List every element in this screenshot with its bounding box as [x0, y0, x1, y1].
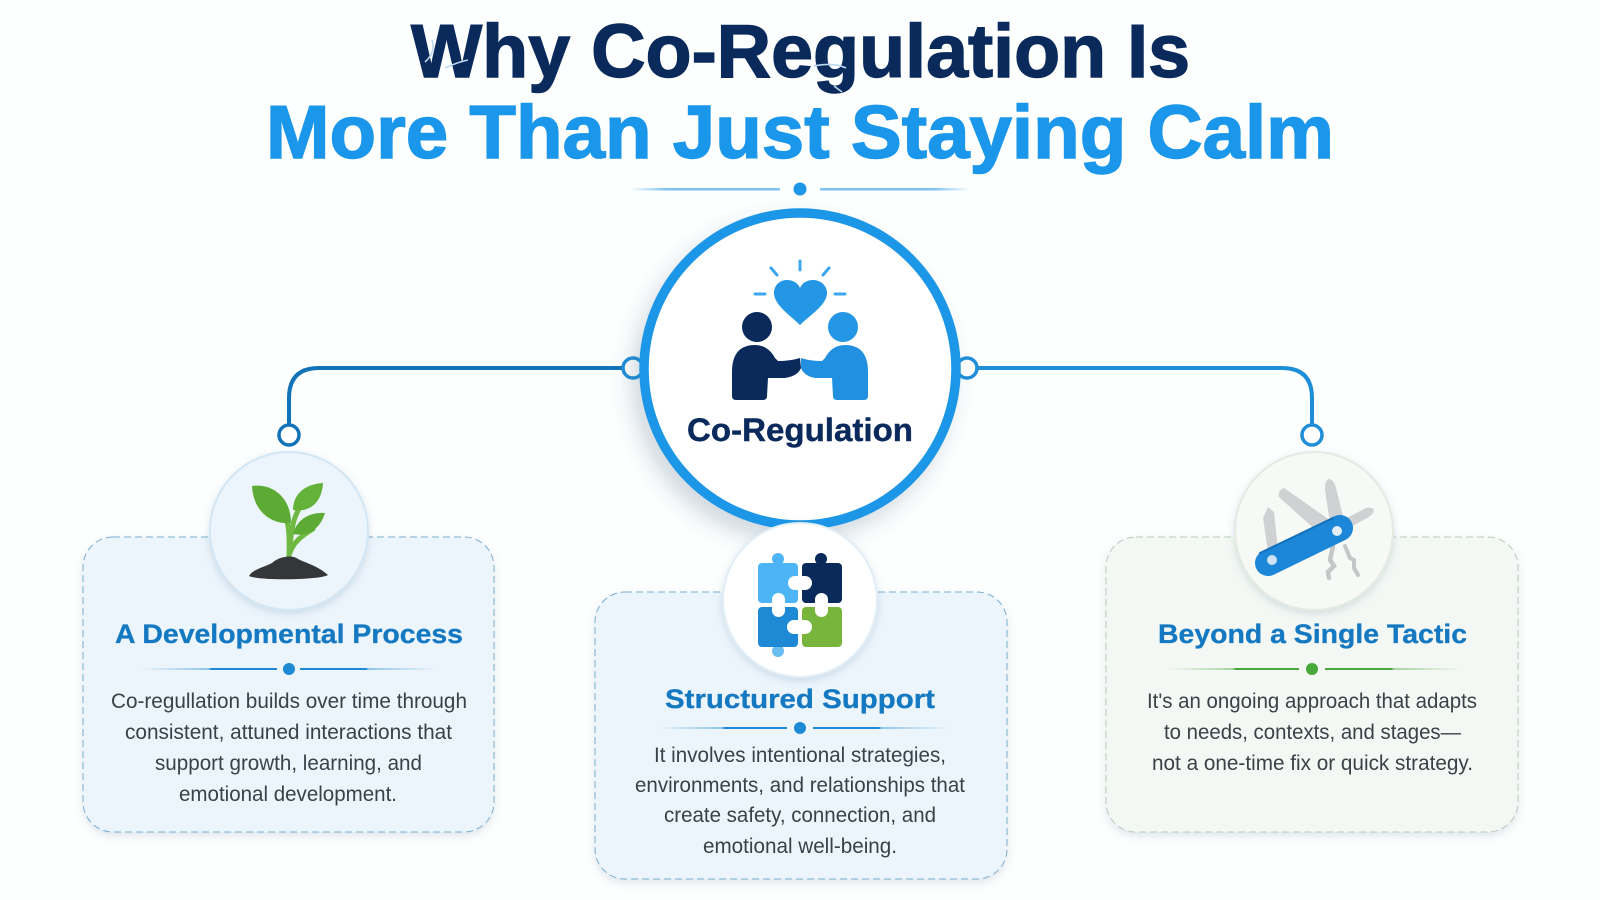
- heading: beyond a single tactic: Beyond a Single Tactic: [1158, 619, 1467, 649]
- body text: left card: emotional development.: [179, 783, 397, 806]
- divider: left card: [140, 663, 437, 675]
- icon badge: sprout: [210, 452, 368, 610]
- body text: left card: Co-regullation builds over time through: [111, 690, 467, 713]
- body text: left card: [111, 690, 467, 806]
- icon: two people with heart: [732, 261, 868, 400]
- body text: center card: create safety, connection, and: [664, 804, 936, 827]
- panel: a developmental process: [83, 537, 494, 832]
- body text: left card: consistent, attuned interactions that: [125, 721, 452, 744]
- icon badge: puzzle: [723, 523, 877, 677]
- body text: center card: [635, 744, 965, 858]
- icon badge: multi-tool: [1235, 452, 1393, 610]
- divider: right card: [1167, 663, 1463, 675]
- heading: a developmental process: A Developmental Process: [115, 619, 463, 649]
- body text: center card: environments, and relationships that: [635, 774, 965, 797]
- title: Why Co-Regulation Is: [411, 9, 1190, 93]
- title divider: [630, 182, 970, 196]
- panel: beyond a single tactic: [1106, 537, 1518, 832]
- heading: structured support: Structured Support: [665, 684, 935, 714]
- body text: center card: emotional well-being.: [703, 835, 897, 858]
- body text: center card: It involves intentional strategies,: [654, 744, 946, 767]
- connector: right branch: [957, 358, 1322, 445]
- body text: right card: to needs, contexts, and stages—: [1164, 721, 1461, 744]
- hub label: Co-Regulation: [687, 412, 913, 448]
- title: More Than Just Staying Calm: [266, 90, 1334, 174]
- body text: right card: not a one-time fix or quick strategy.: [1152, 752, 1473, 775]
- divider: center card: [657, 722, 950, 734]
- body text: right card: It's an ongoing approach that adapts: [1147, 690, 1477, 713]
- title: [266, 9, 1334, 174]
- connector: left branch: [279, 358, 643, 445]
- body text: left card: support growth, learning, and: [155, 752, 422, 775]
- body text: right card: [1147, 690, 1477, 775]
- panel: structured support: [595, 592, 1007, 879]
- central hub circle: [644, 213, 956, 525]
